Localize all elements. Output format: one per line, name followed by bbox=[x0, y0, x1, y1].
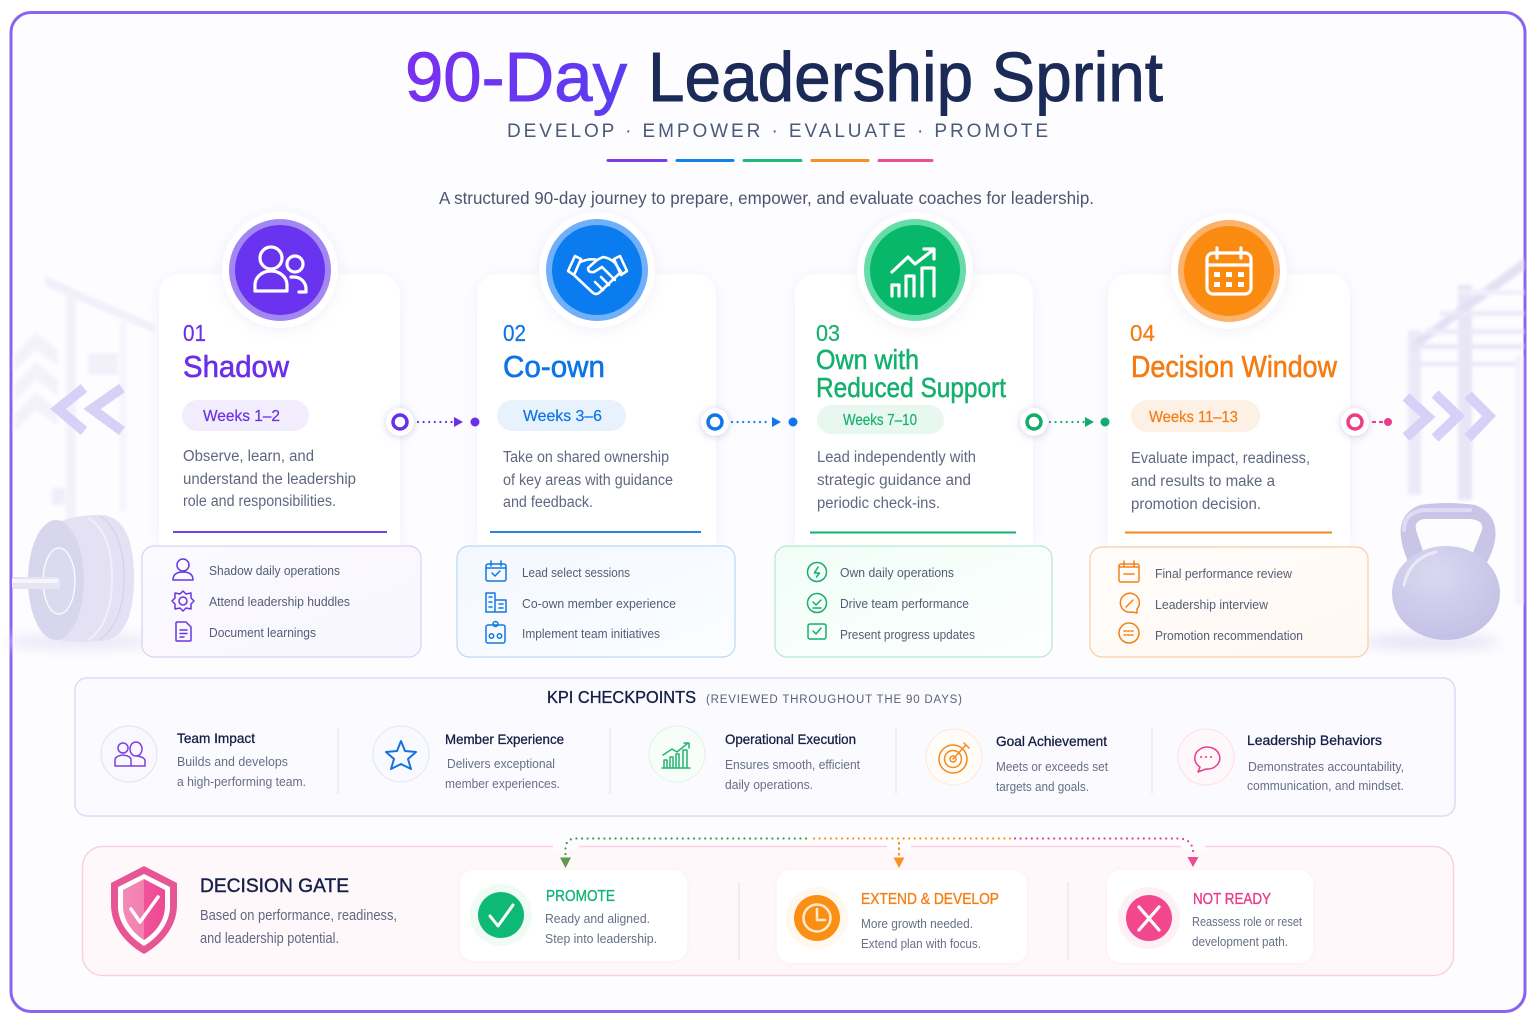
icon: calendar minus bbox=[1119, 561, 1139, 582]
background: right chevrons bbox=[1406, 394, 1489, 438]
subtitle: DEVELOP · EMPOWER · EVALUATE · PROMOTE bbox=[507, 121, 1048, 142]
icon: people bbox=[229, 219, 331, 321]
description: understand the leadership bbox=[183, 471, 356, 488]
icon: shield bbox=[111, 866, 177, 954]
description: and results to make a bbox=[1131, 473, 1275, 490]
weeks pill: Weeks 1–2 bbox=[203, 408, 280, 425]
panel: step 2 tasks: Implement team initiatives bbox=[522, 627, 660, 641]
title: 90-Day bbox=[405, 38, 627, 116]
step title: Reduced Support bbox=[816, 372, 1006, 403]
panel: step 1 tasks bbox=[142, 546, 421, 657]
step title: Own with bbox=[816, 344, 919, 375]
outcome: extend and develop: Extend plan with focus. bbox=[861, 936, 981, 951]
panel: step 2 tasks: Lead select sessions bbox=[522, 566, 630, 580]
outcome: extend and develop: More growth needed. bbox=[861, 916, 973, 931]
KPI: member experience bbox=[373, 726, 564, 791]
KPI: goal achievement: targets and goals. bbox=[996, 779, 1089, 794]
panel: step 4 tasks bbox=[1090, 547, 1368, 657]
icon: calendar bbox=[1178, 220, 1280, 322]
title: Leadership Sprint bbox=[648, 38, 1163, 116]
outcome: promote: PROMOTE bbox=[546, 888, 615, 905]
panel: step 3 tasks: Present progress updates bbox=[840, 628, 975, 642]
description bbox=[817, 449, 976, 512]
arrow: step 1 to 2 bbox=[386, 408, 480, 436]
arrow: decision path to not ready bbox=[1015, 838, 1198, 867]
background: left chevrons bbox=[58, 388, 122, 431]
outcome: extend and develop bbox=[777, 870, 1027, 963]
icon: calendar check bbox=[486, 561, 506, 581]
panel: decision gate bbox=[82, 842, 1454, 976]
panel: step 2 tasks bbox=[457, 546, 735, 657]
step title bbox=[816, 344, 1006, 403]
panel: step 1 Shadow bbox=[159, 212, 400, 546]
gate heading and text bbox=[200, 875, 397, 947]
outcome: not ready bbox=[1107, 870, 1313, 963]
weeks pill: Weeks 7–10 bbox=[843, 412, 917, 429]
background: left gym rack bbox=[14, 276, 155, 521]
KPI: leadership behaviors: Demonstrates accountability, bbox=[1248, 759, 1404, 774]
icon: handshake bbox=[546, 219, 648, 321]
panel: step 4 tasks: Promotion recommendation bbox=[1155, 629, 1303, 643]
panel: step 3 tasks: Drive team performance bbox=[840, 597, 969, 611]
description: and feedback. bbox=[503, 494, 593, 511]
icon: speech bubble bbox=[1120, 593, 1139, 613]
icon: clipboard team bbox=[486, 622, 505, 643]
description: Observe, learn, and bbox=[183, 448, 314, 465]
panel: step 1 tasks: Document learnings bbox=[209, 626, 316, 640]
outcome: promote: Ready and aligned. bbox=[545, 911, 650, 926]
KPI: operational execution: Operational Execution bbox=[725, 731, 856, 747]
KPI: operational execution bbox=[649, 726, 860, 792]
panel: KPI checkpoints bbox=[75, 678, 1455, 816]
background: barbell plate bbox=[5, 515, 155, 649]
panel: step 4 Decision Window: Decision Window bbox=[1131, 349, 1338, 384]
KPI: operational execution: Ensures smooth, efficient bbox=[725, 757, 860, 772]
outcome: not ready: development path. bbox=[1192, 934, 1288, 949]
KPI: leadership behaviors: Leadership Behaviors bbox=[1247, 732, 1382, 748]
description: periodic check-ins. bbox=[817, 495, 940, 512]
outcome: not ready: Reassess role or reset bbox=[1192, 914, 1302, 929]
description: Evaluate impact, readiness, bbox=[1131, 450, 1310, 467]
KPI: team impact bbox=[101, 726, 306, 789]
KPI heading bbox=[547, 687, 962, 707]
KPI: operational execution: daily operations. bbox=[725, 777, 813, 792]
panel: step 4 tasks: Final performance review bbox=[1155, 567, 1293, 581]
weeks pill bbox=[497, 400, 626, 431]
KPI: leadership behaviors: communication, and mindset. bbox=[1247, 778, 1404, 793]
outcome: promote: Step into leadership. bbox=[545, 931, 657, 946]
description bbox=[1131, 450, 1310, 513]
KPI: team impact: Builds and develops bbox=[177, 754, 288, 769]
description bbox=[503, 449, 673, 511]
KPI: team impact: a high-performing team. bbox=[177, 774, 306, 789]
intro sentence: A structured 90-day journey to prepare, empower, and evaluate coaches for leadership. bbox=[439, 188, 1094, 208]
panel: step 4 Decision Window: 04 bbox=[1130, 320, 1155, 346]
icon: document bbox=[176, 622, 191, 641]
description: Lead independently with bbox=[817, 449, 976, 466]
arrow: step 4 onward bbox=[1341, 408, 1392, 436]
KPI heading: (REVIEWED THROUGHOUT THE 90 DAYS) bbox=[706, 694, 962, 706]
icon: gear bbox=[172, 591, 194, 611]
arrow: step 3 to 4 bbox=[1020, 408, 1110, 436]
gate heading and text: Based on performance, readiness, bbox=[200, 908, 397, 924]
panel: step 4 tasks: Leadership interview bbox=[1155, 598, 1269, 612]
background: kettlebell bbox=[1360, 503, 1500, 649]
KPI: member experience: Delivers exceptional bbox=[447, 756, 555, 771]
outcome: promote bbox=[460, 870, 687, 961]
panel: step 3 tasks: Own daily operations bbox=[840, 566, 954, 580]
weeks pill: Weeks 3–6 bbox=[523, 408, 602, 425]
panel: step 2 Co-own bbox=[477, 212, 716, 546]
KPI: team impact: Team Impact bbox=[177, 730, 255, 746]
weeks pill bbox=[182, 400, 309, 431]
outcome: extend and develop: EXTEND & DEVELOP bbox=[861, 891, 999, 908]
panel: step 2 tasks: Co-own member experience bbox=[522, 597, 676, 611]
icon: circle bolt bbox=[808, 562, 826, 582]
panel: step 1 tasks: Attend leadership huddles bbox=[209, 595, 350, 609]
KPI: goal achievement: Goal Achievement bbox=[996, 733, 1107, 749]
description: role and responsibilities. bbox=[183, 493, 336, 510]
KPI: leadership behaviors bbox=[1178, 729, 1404, 793]
description: of key areas with guidance bbox=[503, 472, 673, 489]
panel: step 3 tasks bbox=[775, 546, 1052, 657]
icon: person bbox=[173, 559, 193, 580]
panel: step 3 Own with Reduced Support bbox=[795, 212, 1033, 546]
description bbox=[183, 448, 356, 510]
arrow: decision path to promote bbox=[560, 838, 806, 868]
weeks pill bbox=[817, 405, 944, 434]
panel: step 2 Co-own: Co-own bbox=[503, 349, 605, 384]
title bbox=[405, 38, 1163, 116]
description: Take on shared ownership bbox=[503, 449, 669, 466]
gate heading and text: and leadership potential. bbox=[200, 931, 339, 947]
description: strategic guidance and bbox=[817, 472, 971, 489]
arrow: step 2 to 3 bbox=[701, 408, 798, 436]
arrow: decision path to extend bbox=[811, 838, 1010, 868]
weeks pill bbox=[1131, 400, 1260, 432]
panel: step 1 Shadow: Shadow bbox=[183, 349, 290, 384]
panel: step 2 Co-own: 02 bbox=[503, 320, 526, 346]
panel: step 4 Decision Window bbox=[1108, 213, 1350, 546]
KPI: goal achievement bbox=[926, 729, 1108, 794]
description: promotion decision. bbox=[1131, 496, 1261, 513]
colored accent bars bbox=[608, 159, 932, 162]
gate heading and text: DECISION GATE bbox=[200, 875, 349, 897]
outcome: not ready: NOT READY bbox=[1193, 891, 1271, 908]
KPI heading: KPI CHECKPOINTS bbox=[547, 687, 696, 707]
KPI: goal achievement: Meets or exceeds set bbox=[996, 759, 1108, 774]
icon: growth chart bbox=[864, 219, 966, 321]
weeks pill: Weeks 11–13 bbox=[1149, 409, 1238, 426]
panel: step 1 Shadow: 01 bbox=[183, 320, 206, 346]
background: right gym rack bbox=[1408, 258, 1524, 605]
icon: check box bbox=[808, 624, 826, 639]
KPI: member experience: member experiences. bbox=[445, 776, 560, 791]
panel: step 3 Own with Reduced Support: 03 bbox=[816, 320, 840, 346]
panel: step 1 tasks: Shadow daily operations bbox=[209, 564, 340, 578]
icon: building bbox=[486, 593, 506, 612]
icon: circle list bbox=[1119, 623, 1139, 643]
icon: circle check bbox=[808, 594, 826, 612]
KPI: member experience: Member Experience bbox=[445, 731, 564, 747]
